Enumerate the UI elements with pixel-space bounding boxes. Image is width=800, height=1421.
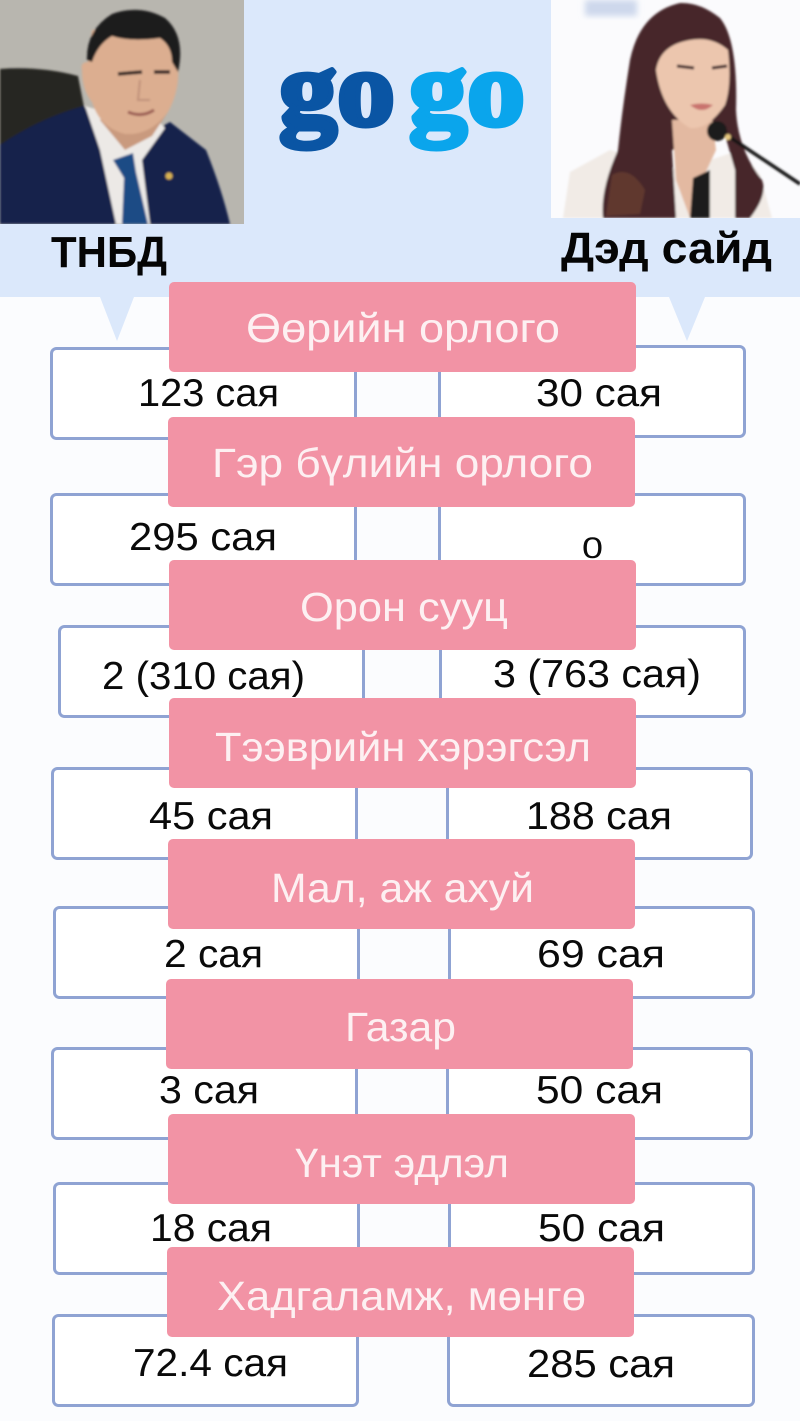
row 3: Орон сууц: Орон сууц (300, 584, 508, 630)
row 5: Мал, аж ахуй (54, 839, 754, 998)
row 2: Гэр бүлийн орлого: 295 сая (129, 516, 277, 559)
row 7: Үнэт эдлэл: Үнэт эдлэл (295, 1140, 509, 1186)
row 2: Гэр бүлийн орлого (52, 417, 744, 584)
logo: gogo (279, 30, 525, 149)
row 4: Тээврийн хэрэгсэл (52, 698, 752, 858)
logo word: go light blue: go (409, 30, 525, 149)
row 8: Хадгаламж, мөнгө: 72.4 сая (133, 1342, 288, 1385)
row 1: Өөрийн орлого: 30 сая (536, 372, 662, 415)
row 8: Хадгаламж, мөнгө: 285 сая (527, 1343, 675, 1386)
row 7: Үнэт эдлэл (54, 1114, 754, 1274)
row 6: Газар: 3 сая (159, 1069, 259, 1112)
photo: ТНБД portrait (0, 0, 244, 224)
row 3: Орон сууц: 3 (763 сая) (493, 653, 701, 696)
row 1: Өөрийн орлого (52, 282, 744, 438)
photo: Дэд сайд portrait (551, 0, 800, 218)
row 4: Тээврийн хэрэгсэл: 45 сая (149, 795, 273, 838)
row 2: Гэр бүлийн орлого: 0 (582, 532, 603, 565)
row 1: Өөрийн орлого: 123 сая (138, 372, 279, 415)
row 6: Газар: 50 сая (536, 1069, 663, 1112)
row 6: Газар (52, 979, 752, 1138)
row 3: Орон сууц (60, 560, 744, 716)
row 5: Мал, аж ахуй: 2 сая (164, 933, 263, 976)
label: ТНБД: ТНБД (51, 228, 167, 277)
row 4: Тээврийн хэрэгсэл: 188 сая (526, 795, 672, 838)
row 7: Үнэт эдлэл: 50 сая (538, 1207, 665, 1250)
row 6: Газар: Газар (345, 1004, 456, 1050)
logo word: go dark blue: go (279, 30, 395, 149)
row 2: Гэр бүлийн орлого: Гэр бүлийн орлого (212, 440, 593, 486)
header band (0, 0, 800, 341)
row 8: Хадгаламж, мөнгө (54, 1247, 754, 1406)
row 7: Үнэт эдлэл: 18 сая (150, 1207, 272, 1250)
row 4: Тээврийн хэрэгсэл: Тээврийн хэрэгсэл (215, 724, 591, 770)
row 8: Хадгаламж, мөнгө: Хадгаламж, мөнгө (217, 1273, 586, 1319)
label: Дэд сайд: Дэд сайд (561, 224, 772, 273)
row 3: Орон сууц: 2 (310 сая) (102, 655, 305, 698)
row 1: Өөрийн орлого: Өөрийн орлого (246, 305, 560, 351)
row 5: Мал, аж ахуй: 69 сая (537, 933, 665, 976)
row 5: Мал, аж ахуй: Мал, аж ахуй (271, 865, 534, 911)
